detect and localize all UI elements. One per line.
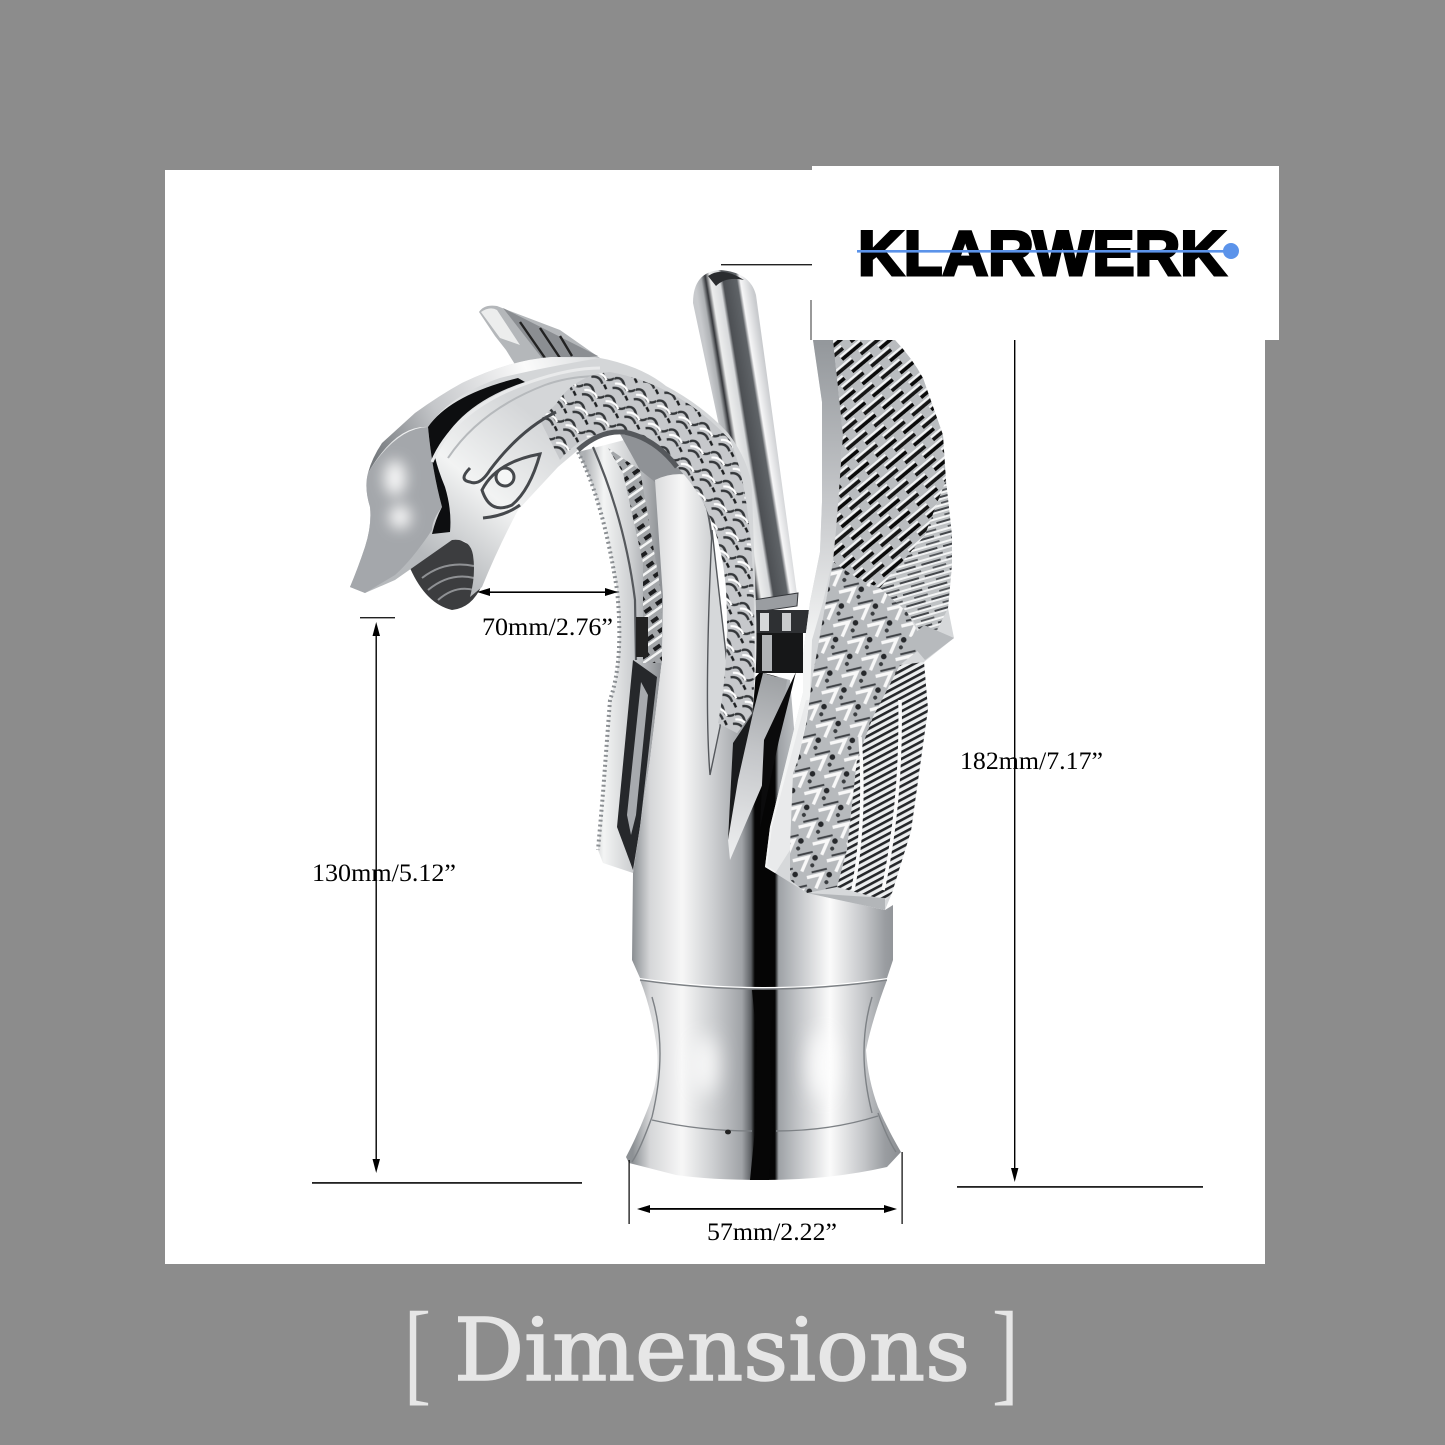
- faucet: base highlights: [692, 1031, 835, 1099]
- title: right bracket: ]: [992, 1289, 1019, 1415]
- wing: lower lobe: [767, 700, 810, 872]
- faucet: pedestal base: [626, 980, 901, 1180]
- label: 130mm: 130mm/5.12”: [312, 858, 456, 887]
- label: 70mm: 70mm/2.76”: [482, 612, 613, 641]
- swan faucet product image: [350, 270, 954, 1180]
- faucet: engraved neck pattern: [540, 372, 755, 733]
- wing: arrow feathers: [790, 562, 925, 893]
- faucet: black head band: [428, 378, 525, 534]
- faucet: base seams: [632, 980, 896, 1162]
- logo wordmark: KLARWERK: [858, 219, 1226, 289]
- faucet: arch underside band: [578, 432, 677, 467]
- white product panel: [165, 170, 1265, 1264]
- faucet: central tail blade: [728, 673, 787, 860]
- faucet: body and upper cylinder: [632, 474, 893, 987]
- logo blue line and dot: [857, 243, 1239, 259]
- faucet: neck inner edge line: [697, 477, 720, 663]
- faucet: rear wing tip: [479, 306, 600, 366]
- title: [404, 1289, 1019, 1415]
- faucet: swan head and arched neck: [350, 357, 756, 733]
- faucet: neck side ridge: [707, 530, 727, 775]
- wing: striped tail feathers: [837, 662, 928, 900]
- label: 182mm: 182mm/7.17”: [960, 746, 1103, 775]
- dimension: spout height 130mm: [312, 617, 582, 1184]
- faucet: head blob: [350, 427, 442, 593]
- title: word: Dimensions: [454, 1301, 970, 1401]
- wing: silver blade: [765, 340, 843, 873]
- faucet: arch shadow above body: [620, 434, 700, 482]
- wing: black upper hatching: [833, 340, 946, 590]
- faucet: lever handle: [693, 270, 810, 673]
- faucet: silver ridge: [432, 368, 600, 462]
- faucet: wing edge sliver: [810, 300, 812, 340]
- label: 57mm: 57mm/2.22”: [707, 1217, 837, 1246]
- faucet: black reflection stripe: [750, 990, 775, 1180]
- faucet: right wing: [760, 340, 954, 910]
- faucet: eye detail: [464, 412, 556, 518]
- dimension: overall height 182mm: [721, 264, 1203, 1188]
- faucet: head highlights: [384, 460, 411, 529]
- faucet: spout opening: [410, 536, 484, 610]
- faucet: base mark: [725, 1130, 731, 1134]
- faucet: rear wing lower: [578, 436, 680, 873]
- title: left bracket: [: [404, 1289, 431, 1415]
- dimension: base width 57mm: [628, 1152, 903, 1246]
- logo panel: [812, 166, 1279, 340]
- dimension: spout reach 70mm: [477, 588, 618, 641]
- faucet: top crest: [368, 357, 600, 473]
- wing: lighter mid hatching: [880, 480, 952, 645]
